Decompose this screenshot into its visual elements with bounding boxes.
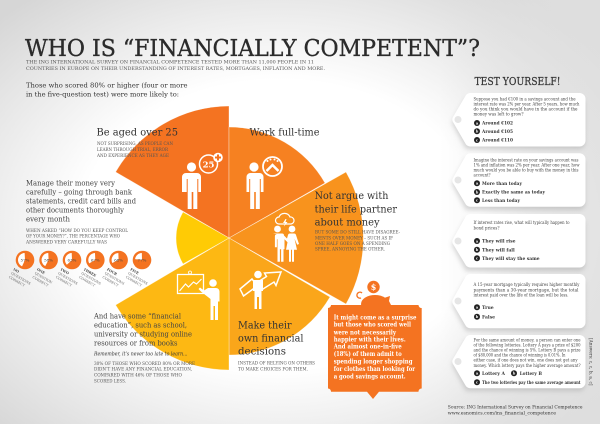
card 2: inflation question: 1% and inflation was 2% per year. After one year, how — [474, 162, 580, 168]
pie charts: percentage by questions correct — [16, 251, 151, 269]
card 4: mortgage question: a — [476, 306, 479, 310]
heading: not argue with life partner: Not argue with — [315, 190, 389, 202]
card 4: mortgage question: interest paid over the life of the loan will be less. — [474, 292, 568, 297]
callout: savings surprise: a good savings account. — [334, 373, 406, 380]
card 2: inflation question: account? — [474, 172, 491, 178]
pie chart labels: FOUR — [106, 267, 118, 277]
detail: financial education: COMPARED WITH 46% OF THOSE WHO — [94, 372, 182, 378]
card 1: savings account question: interest rate was 2% per year. After 5 years, how much — [474, 102, 580, 107]
card 5: lottery question: Lottery B — [520, 371, 542, 377]
heading: financial education: education”, such as school, — [94, 320, 187, 329]
card 5: lottery question: c — [476, 381, 479, 385]
icon: person aged over 25: 25 — [203, 160, 214, 170]
detail: financial education — [94, 361, 195, 384]
detail: keep control of money — [25, 227, 128, 245]
pie chart labels: FIVE — [130, 267, 140, 276]
detail: own financial decisions — [238, 360, 315, 372]
callout: savings surprise: (18%) of them admit to — [334, 351, 402, 358]
heading: financial education: university or studying online — [94, 329, 192, 338]
heading: manage money carefully: carefully – going through bank — [26, 188, 132, 197]
card 1: savings account question: b — [476, 130, 479, 134]
card 5: lottery question: a — [476, 372, 479, 376]
heading: not argue with life partner: their life partner — [315, 203, 398, 215]
card 4: mortgage question: A 15-year mortgage typically requires higher monthly — [473, 282, 580, 287]
source credit: www.esnomics.com/ins_financial_competence — [448, 410, 556, 416]
source credit: Source: ING International Survey on Financial Competence — [448, 404, 583, 410]
detail: keep control of money: OF YOUR MONEY?”, THE PERCENTAGE WHO — [26, 234, 120, 240]
heading: manage money carefully: other documents thoroughly — [26, 206, 125, 215]
detail: financial education: SCORED LESS. — [94, 378, 127, 384]
card 1: savings account question: do you think you would have in the account if the — [474, 107, 578, 112]
card 3: bond prices question: b — [476, 248, 479, 252]
heading: manage money carefully: every month — [26, 215, 70, 224]
detail: be aged over 25 — [96, 141, 173, 159]
callout: savings surprise: happier with their lives. — [334, 336, 406, 343]
card 3: bond prices question: If interest rates rise, what will typically happen to — [474, 220, 570, 225]
card 4: mortgage question — [452, 274, 586, 331]
detail: own financial decisions: INSTEAD OF RELYING ON OTHERS — [238, 360, 315, 366]
detail: disagreements: MENTS OVER MONEY – SUCH AS IF — [315, 235, 393, 241]
pie chart labels: CORRECT — [32, 275, 50, 288]
pie chart labels: NO — [12, 267, 20, 274]
detail: be aged over 25: AND EXPERIENCE AS THEY AGE — [96, 153, 169, 159]
detail: disagreements: BUT SOME DO STILL HAVE DISAGREE- — [315, 230, 400, 236]
detail: keep control of money: ANSWERED VERY CAREFULLY WAS — [25, 239, 107, 245]
pie chart labels — [8, 267, 151, 290]
heading: financial education — [93, 311, 192, 348]
heading: not argue with life partner: about money — [315, 216, 380, 228]
heading: be aged over 25: Be aged over 25 — [96, 127, 178, 139]
card 2: inflation question: a — [476, 182, 479, 186]
icon: person aged over 25 — [182, 153, 223, 209]
card 1: savings account question: c — [476, 138, 479, 142]
pie charts: percentage by questions correct: 58% — [44, 258, 53, 262]
icon: teacher with chart board — [178, 271, 220, 320]
card 3: bond prices question: They will rise — [482, 239, 516, 245]
radial sector chart — [116, 106, 363, 370]
subheading: in the five-question test) were more likely to: — [26, 91, 179, 99]
intro survey description: THE ING INTERNATIONAL SURVEY ON FINANCIAL COMPETENCE TESTED MORE THAN 11,000 PEOPLE IN 11 — [26, 60, 314, 66]
pie chart labels: QUESTIONS — [10, 271, 32, 286]
subheading — [26, 82, 188, 99]
callout: savings surprise: It might come as a surprise — [334, 314, 416, 321]
card 2: inflation question: b — [476, 190, 479, 194]
pie charts: percentage by questions correct: 57% — [21, 258, 30, 262]
card 5: lottery question: and the chance of winning is 5%. Lottery B pays a prize — [474, 348, 581, 352]
card 2: inflation question: c — [476, 199, 479, 203]
card 1: savings account question: Around €105 — [481, 129, 513, 135]
callout: savings surprise: were not necessarily — [333, 329, 396, 336]
card 3: bond prices question: a — [476, 239, 479, 243]
title: WHO IS “FINANCIALLY COMPETENT”? — [25, 36, 480, 62]
card 2: inflation question — [452, 153, 586, 210]
card 1: savings account question: Around €110 — [481, 138, 513, 144]
callout: savings surprise: spending longer shopping — [334, 358, 413, 365]
card 5: lottery question: of the following lotteries. Lottery A pays a prize of $200 — [474, 342, 581, 348]
card 1: savings account question — [452, 93, 586, 149]
intro survey description — [26, 60, 326, 72]
card 1: savings account question: Suppose you had €100 in a savings account and the — [474, 97, 576, 102]
subheading: Those who scored 80% or higher (four or more — [26, 82, 188, 90]
detail: keep control of money: WHEN ASKED “HOW DO YOU KEEP CONTROL — [26, 227, 128, 234]
card 5: lottery question: money. Which lottery pays the higher average amount? — [474, 363, 581, 368]
pie charts: percentage by questions correct: 63% — [68, 258, 77, 262]
pie chart labels: CORRECT — [102, 275, 120, 288]
card 5: lottery question — [452, 335, 586, 391]
detail: financial education: 30% OF THOSE WHO SCORED 80% OR MORE — [94, 361, 195, 367]
pie charts: percentage by questions correct: 68% — [114, 258, 123, 262]
icon: person working full-time with clock — [246, 157, 282, 209]
card 5: lottery question: either case, if one does not win, one does not get any — [474, 358, 578, 362]
heading: test yourself: TEST YOURSELF! — [474, 75, 560, 88]
pie chart labels: QUESTIONS — [127, 271, 149, 286]
heading: work full-time: Work full-time — [250, 127, 320, 139]
pie chart labels: CORRECT — [78, 275, 96, 288]
answers note: [Answers: c, c, b, a, c] — [588, 338, 594, 386]
card 1: savings account question: money was left to grow? — [474, 112, 524, 117]
heading: financial education: resources or from books — [94, 339, 178, 348]
detail: be aged over 25: NOT SURPRISING, AS PEOPLE CAN — [97, 141, 173, 147]
remark: never too late: Remember, it’s never too late to learn... — [93, 352, 188, 358]
detail: disagreements: ONE HALF GOES ON A SPENDING — [315, 241, 390, 247]
card 3: bond prices question: They will fall — [482, 247, 515, 253]
pie chart labels: TWO — [60, 267, 70, 276]
card 1: savings account question: Around €102 — [481, 121, 513, 127]
callout: savings surprise — [328, 305, 422, 399]
card 5: lottery question: of $80,000 and the chance of winning is 0.01%. In — [474, 352, 566, 358]
pie chart labels: QUESTION — [34, 271, 53, 285]
pie chart labels: THREE — [83, 267, 97, 278]
pie chart labels: QUESTIONS — [57, 271, 79, 286]
heading: manage money carefully: Manage their money very — [26, 179, 116, 188]
icon: piggy bank with coin: $ — [371, 282, 376, 292]
intro survey description: COUNTRIES IN EUROPE ON THEIR UNDERSTANDING OF INTEREST RATES, MORTGAGES, INFLATION AND MORE. — [26, 66, 326, 72]
pie chart labels: ONE — [36, 267, 46, 275]
heading: own financial decisions — [238, 319, 304, 357]
pie chart labels: CORRECT — [55, 275, 73, 288]
pie chart labels: CORRECT — [125, 275, 143, 288]
heading: own financial decisions: decisions — [238, 345, 286, 357]
detail: disagreements — [315, 230, 400, 253]
pie chart labels: CORRECT — [8, 275, 26, 288]
card 2: inflation question: Exactly the same as today — [482, 190, 546, 196]
card 3: bond prices question: bond prices? — [474, 225, 500, 230]
detail: own financial decisions: TO MAKE CHOICES FOR THEM. — [238, 366, 309, 372]
card 2: inflation question: Imagine the interest rate on your savings account was — [474, 158, 578, 162]
card 2: inflation question: Less than today — [482, 198, 521, 204]
heading: own financial decisions: Make their — [238, 319, 292, 331]
detail: disagreements: SPREE, ANNOYING THE OTHER. — [315, 247, 385, 253]
card 3: bond prices question: They will stay the same — [482, 256, 540, 262]
card 4: mortgage question: payments than a 30-year mortgage, but the total — [474, 287, 579, 292]
card 4: mortgage question: True — [482, 305, 494, 311]
callout: savings surprise: for clothes than looking for — [334, 366, 416, 373]
source credit — [448, 404, 583, 416]
heading: own financial decisions: own financial — [238, 333, 304, 345]
pie chart labels: QUESTIONS — [104, 271, 126, 286]
detail: be aged over 25: LEARN THROUGH TRIAL, ERROR — [97, 147, 169, 153]
heading: manage money carefully: statements, credit card bills and — [26, 197, 136, 206]
card 3: bond prices question — [452, 214, 586, 271]
icon: person carrying rising arrow — [240, 271, 281, 309]
card 5: lottery question: b — [513, 372, 516, 376]
heading: financial education: And have some “financial — [93, 311, 181, 320]
card 2: inflation question: More than today — [482, 181, 523, 187]
heading: not argue with life partner — [315, 190, 398, 228]
icon: piggy bank with coin — [357, 281, 391, 313]
card 5: lottery question: Lottery A — [482, 371, 505, 377]
pie chart labels: QUESTIONS — [81, 271, 102, 286]
detail: financial education: DIDN’T HAVE ANY FINANCIAL EDUCATION, — [94, 367, 192, 373]
card 3: bond prices question: c — [476, 257, 479, 261]
icon: couple under storm cloud — [273, 213, 299, 262]
callout: savings surprise: And almost one-in-five — [333, 344, 402, 351]
card 4: mortgage question: b — [476, 315, 479, 319]
heading: manage money carefully — [26, 179, 136, 224]
card 2: inflation question: much would you be able to buy with the money in this — [474, 168, 578, 172]
pie charts: percentage by questions correct: 67% — [91, 258, 100, 262]
callout: savings surprise: but those who scored well — [334, 322, 412, 329]
card 4: mortgage question: False — [482, 314, 495, 320]
card 1: savings account question: a — [476, 121, 479, 125]
pie charts: percentage by questions correct: 77% — [138, 258, 147, 262]
card 5: lottery question: For the same amount of money, a person can enter one — [474, 338, 581, 342]
